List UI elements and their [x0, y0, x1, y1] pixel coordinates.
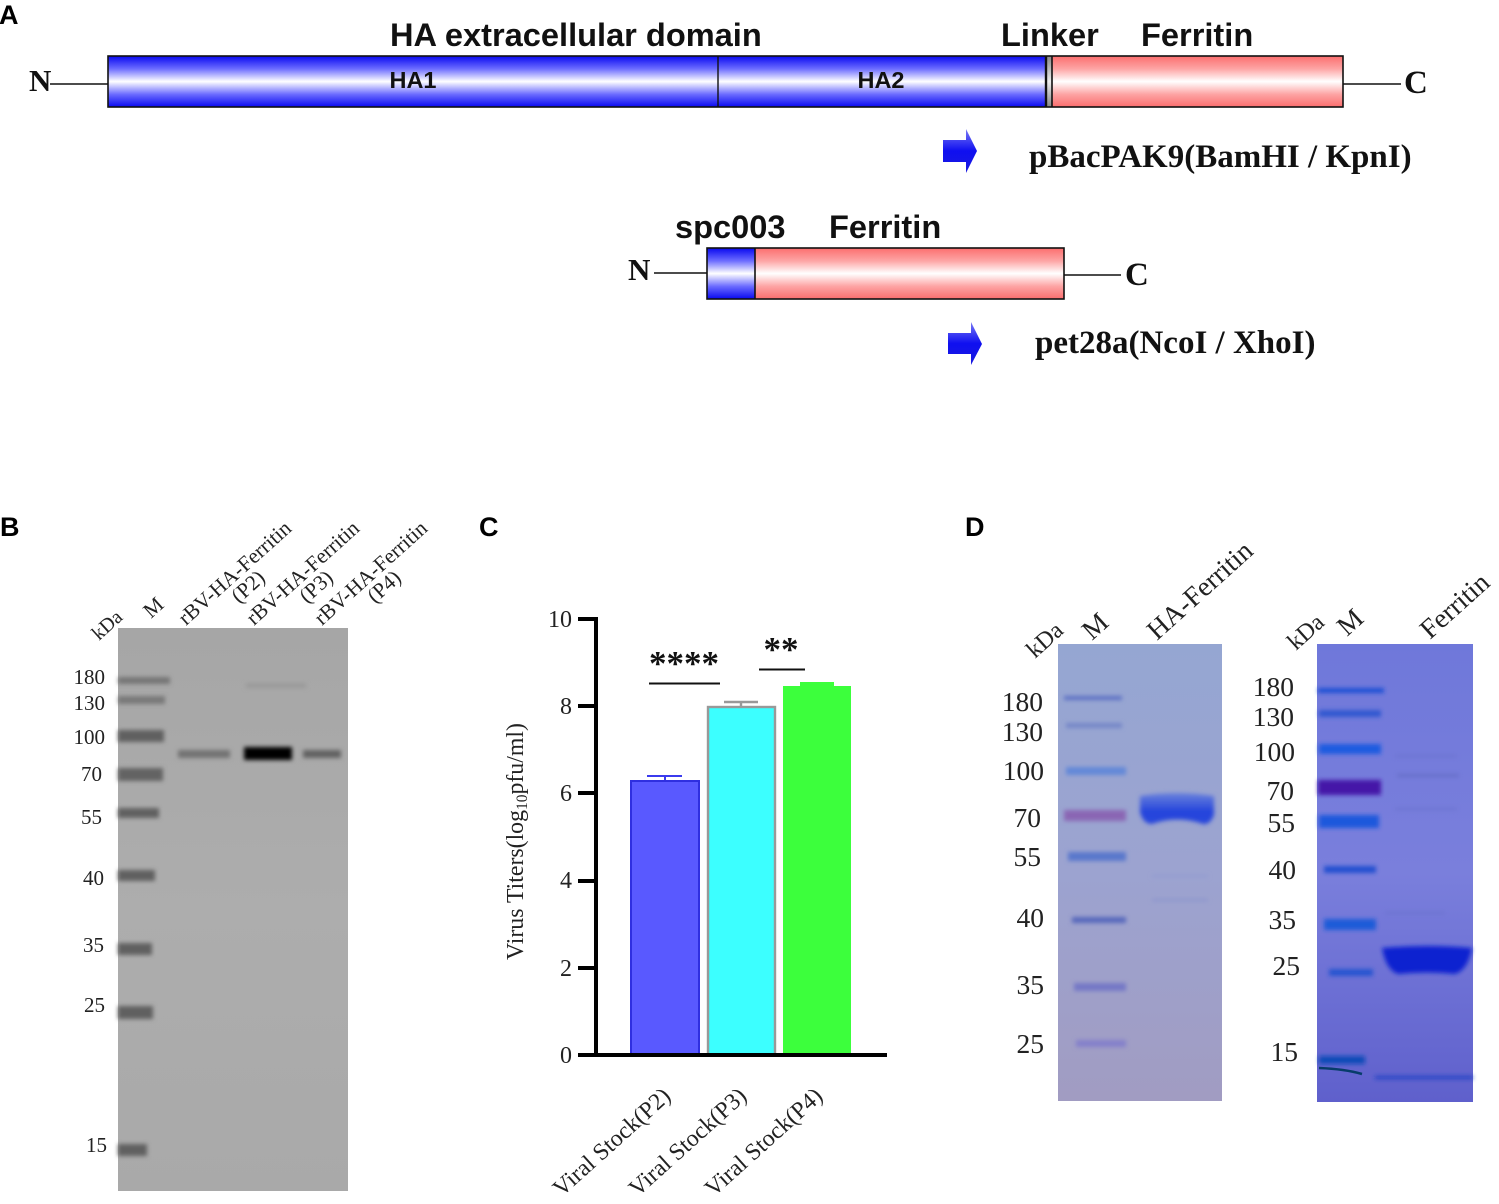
gel Ferritin lane headers: M	[1330, 602, 1369, 641]
gel HA-Ferritin labels: 70	[1014, 802, 1041, 833]
blot labels: 35	[83, 933, 104, 957]
y tick labels: 6	[560, 781, 572, 807]
blot lane headers: kDa	[88, 606, 127, 645]
bar P4	[783, 682, 851, 1055]
heading: HA extracellular domain: HA extracellular domain	[390, 16, 762, 53]
Ferritin construct bar	[707, 248, 1064, 299]
blot labels: 180	[74, 665, 105, 689]
blot labels: 15	[86, 1133, 107, 1157]
y axis title: Virus Titers(log	[503, 810, 529, 960]
blot labels: 55	[81, 805, 102, 829]
blot labels: 70	[81, 762, 102, 786]
label HA1: HA1	[389, 67, 437, 93]
C terminus with line: C	[1404, 65, 1428, 101]
gel Ferritin labels: 70	[1266, 775, 1294, 806]
y tick labels: 2	[560, 956, 572, 982]
gel HA-Ferritin labels: 25	[1016, 1028, 1044, 1059]
heading: Linker: Linker	[1001, 16, 1099, 53]
blot lane headers: M	[138, 592, 168, 623]
gel HA-Ferritin lane headers: kDa	[1022, 617, 1069, 663]
vector label pBacPAK9: pBacPAK9(BamHI / KpnI)	[1029, 139, 1412, 175]
significance P3 vs P4: **	[764, 630, 798, 669]
gel HA-Ferritin lane headers: HA-Ferritin	[1140, 534, 1259, 645]
C terminus 2 with line: C	[1125, 257, 1149, 293]
gel HA-Ferritin labels: 130	[1002, 716, 1043, 747]
heading: spc003: spc003	[675, 208, 786, 245]
N terminus with line	[29, 63, 108, 98]
gel Ferritin labels: 40	[1268, 854, 1296, 885]
icon: blue arrow 2	[948, 322, 982, 365]
gel Ferritin lane headers	[1283, 566, 1496, 655]
bar chart	[503, 607, 887, 1202]
blot labels: 40	[83, 866, 104, 890]
x tick labels: Viral Stock(P3)	[624, 1083, 752, 1202]
heading: Ferritin 2: Ferritin	[829, 208, 941, 245]
label HA2: HA2	[857, 67, 905, 93]
panel B: western blot	[0, 512, 432, 1191]
bar P2	[631, 776, 699, 1055]
gel Ferritin labels: 55	[1268, 807, 1295, 838]
bar P3	[708, 702, 775, 1055]
y axis title: 10	[514, 794, 531, 810]
gel Ferritin labels: 35	[1268, 904, 1296, 935]
axes	[578, 619, 887, 1055]
blot labels: 25	[84, 993, 105, 1017]
blot labels: 130	[74, 691, 105, 715]
x tick labels: Viral Stock(P2)	[548, 1083, 676, 1202]
x tick labels: Viral Stock(P4)	[700, 1083, 828, 1202]
N terminus 2 with line	[628, 252, 707, 287]
gel Ferritin lane headers: kDa	[1283, 609, 1330, 655]
y tick labels	[548, 607, 572, 1069]
blot lane headers: rBV-HA-Ferritin	[241, 516, 364, 630]
x tick labels	[548, 1083, 828, 1202]
panel D: SDS-PAGE gels	[965, 512, 1496, 1102]
gel HA-Ferritin labels: 55	[1014, 841, 1041, 872]
blot lane headers: rBV-HA-Ferritin	[309, 516, 432, 630]
blot lane headers: (P3)	[294, 565, 338, 608]
gel Ferritin labels: 15	[1270, 1036, 1298, 1067]
gel Ferritin labels: 100	[1254, 736, 1295, 767]
gel Ferritin labels: 25	[1272, 950, 1300, 981]
N terminus 2 with line: N	[628, 252, 650, 287]
C terminus 2 with line	[1064, 257, 1149, 293]
y axis title: pfu/ml)	[503, 723, 529, 795]
blot lane headers: rBV-HA-Ferritin	[173, 516, 296, 630]
blot lane headers: (P4)	[362, 565, 406, 608]
gel Ferritin labels: 180	[1253, 671, 1294, 702]
gel HA-Ferritin labels: 35	[1016, 969, 1044, 1000]
y tick labels: 10	[548, 607, 572, 633]
vector label pet28a: pet28a(NcoI / XhoI)	[1035, 325, 1315, 361]
gel HA-Ferritin labels: 180	[1002, 686, 1043, 717]
blot labels	[74, 665, 107, 1157]
N terminus with line: N	[29, 63, 51, 98]
blot labels: 100	[74, 725, 105, 749]
icon: blue arrow 1	[943, 129, 977, 173]
panel A: construct diagrams	[0, 0, 1428, 365]
blot lane headers	[88, 516, 432, 645]
gel Ferritin labels	[1253, 671, 1300, 1067]
panel label B: B	[0, 512, 20, 542]
panel label C: C	[479, 512, 498, 542]
gel: Ferritin	[1317, 644, 1473, 1102]
gel HA-Ferritin labels: 100	[1003, 755, 1044, 786]
gel HA-Ferritin labels: 40	[1016, 902, 1044, 933]
heading: Ferritin: Ferritin	[1141, 16, 1253, 53]
y tick labels: 8	[560, 694, 572, 720]
y tick labels: 4	[560, 868, 572, 894]
gel HA-Ferritin labels	[1002, 686, 1044, 1059]
gel: HA-Ferritin	[1058, 644, 1222, 1101]
blot lane headers: (P2)	[226, 565, 270, 608]
significance P2 vs P3: ****	[649, 644, 719, 683]
HA-Ferritin construct bar	[108, 56, 1343, 107]
y tick labels: 0	[560, 1043, 572, 1069]
gel Ferritin labels: 130	[1253, 701, 1294, 732]
gel Ferritin lane headers: Ferritin	[1413, 566, 1496, 644]
panel label D: D	[965, 512, 984, 542]
blot image	[118, 628, 348, 1191]
gel HA-Ferritin lane headers: M	[1075, 606, 1114, 645]
gel HA-Ferritin lane headers	[1022, 534, 1259, 663]
panel C: virus titer bar chart	[479, 512, 887, 1202]
C terminus with line	[1343, 65, 1428, 101]
